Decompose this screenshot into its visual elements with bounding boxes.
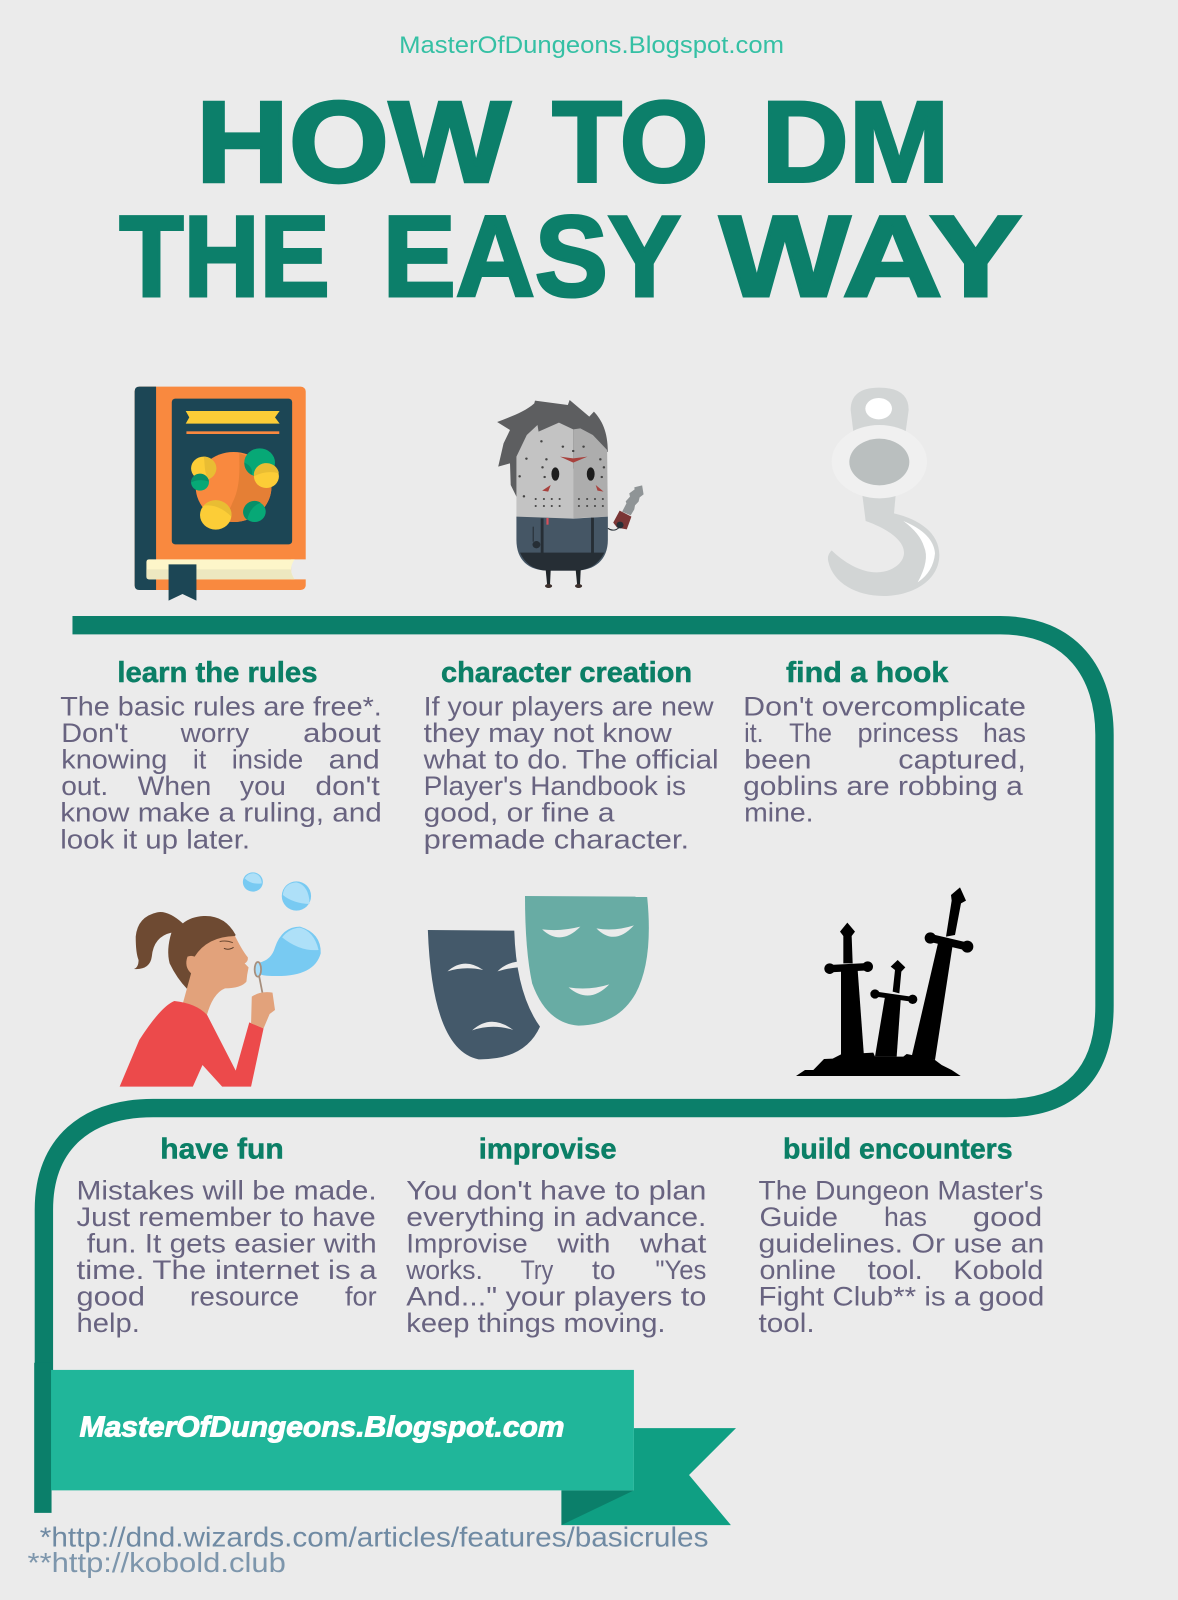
footnote links: **http://kobold.club	[28, 1547, 286, 1578]
icon: crane hook	[828, 388, 939, 596]
text: build encounters: The Dungeon Master's	[758, 1175, 1043, 1205]
footnote links	[28, 1522, 708, 1578]
text: find a hook: princess	[857, 718, 959, 748]
title: EASY	[383, 193, 681, 321]
text: learn the rules: you	[240, 771, 286, 801]
text: learn the rules	[60, 692, 382, 854]
title: TO	[552, 79, 708, 207]
text: learn the rules: about	[303, 718, 381, 748]
text: have fun	[77, 1175, 377, 1338]
icon: swords in the ground	[796, 887, 973, 1076]
text: improvise: with	[556, 1229, 610, 1259]
text: build encounters: tool.	[758, 1308, 815, 1338]
heading: improvise: improvise	[479, 1134, 617, 1166]
text: improvise: everything in advance.	[406, 1202, 706, 1232]
text: build encounters	[758, 1175, 1044, 1338]
icon: rule book	[135, 387, 307, 601]
text: have fun: time. The internet is a	[77, 1255, 377, 1285]
text: learn the rules: worry	[180, 718, 250, 748]
text: improvise: Improvise	[406, 1229, 528, 1259]
text: character creation: If your players are new	[424, 692, 714, 722]
text: build encounters: guidelines. Or use an	[758, 1229, 1044, 1259]
footnote links: *http://dnd.wizards.com/articles/features/basicrules	[40, 1522, 708, 1553]
title: WAY	[720, 193, 1022, 321]
text: build encounters: good	[973, 1202, 1042, 1232]
site url header: MasterOfDungeons.Blogspot.com	[399, 32, 784, 59]
heading: build encounters: build encounters	[783, 1134, 1013, 1166]
text: build encounters: online	[759, 1255, 836, 1285]
text: find a hook: has	[983, 718, 1026, 748]
banner text: MasterOfDungeons.Blogspot.com	[80, 1411, 565, 1443]
heading: learn the rules: learn the rules	[117, 657, 317, 689]
text: learn the rules: knowing	[61, 745, 167, 775]
text: learn the rules: it	[193, 745, 207, 775]
banner ribbon	[51, 1370, 736, 1525]
title: DM	[762, 79, 949, 207]
heading: character creation: character creation	[441, 657, 692, 689]
text: find a hook: Don't overcomplicate	[743, 692, 1026, 722]
text: improvise: And..." your players to	[406, 1282, 706, 1312]
text: find a hook	[743, 692, 1026, 828]
text: improvise: "Yes	[655, 1255, 706, 1285]
text: have fun: resource	[190, 1282, 299, 1312]
text: find a hook: The	[789, 718, 832, 748]
text: have fun: for	[345, 1282, 377, 1312]
text: learn the rules: Don't	[61, 718, 128, 748]
text: character creation: what to do. The official	[423, 745, 719, 775]
winding path line	[43, 625, 1105, 1513]
text: find a hook: captured,	[898, 745, 1026, 775]
icon: hockey mask character	[497, 400, 644, 588]
text: learn the rules: When	[138, 771, 211, 801]
text: improvise: You don't have to plan	[406, 1175, 706, 1205]
text: build encounters: tool.	[868, 1255, 923, 1285]
icon: girl blowing bubbles	[120, 872, 321, 1087]
text: learn the rules: and	[329, 745, 380, 775]
text: have fun: Just remember to have	[77, 1202, 376, 1232]
heading: find a hook: find a hook	[786, 657, 948, 689]
text: find a hook: goblins are robbing a	[743, 771, 1023, 801]
text: have fun: fun. It gets easier with	[87, 1229, 377, 1259]
text: build encounters: has	[884, 1202, 927, 1232]
text: improvise: what	[639, 1229, 707, 1259]
text: character creation: premade character.	[424, 824, 689, 854]
text: character creation: they may not know	[424, 718, 673, 748]
text: learn the rules: The basic rules are free*.	[60, 692, 382, 722]
text: build encounters: Kobold	[953, 1255, 1043, 1285]
text: improvise: to	[592, 1255, 616, 1285]
text: learn the rules: don't	[315, 771, 380, 801]
text: build encounters: Fight Club** is a good	[758, 1282, 1044, 1312]
text: improvise	[405, 1175, 707, 1338]
text: character creation: good, or fine a	[424, 798, 615, 828]
title: HOW	[196, 79, 511, 207]
text: find a hook: mine.	[744, 798, 814, 828]
text: have fun: help.	[77, 1308, 140, 1338]
text: have fun: good	[77, 1282, 145, 1312]
icon: comedy and tragedy masks	[428, 896, 649, 1059]
text: find a hook: been	[744, 745, 812, 775]
text: learn the rules: out.	[61, 771, 108, 801]
text: character creation: Player's Handbook is	[424, 771, 686, 801]
text: build encounters: Guide	[759, 1202, 838, 1232]
heading: have fun: have fun	[160, 1134, 284, 1166]
text: character creation	[423, 692, 719, 854]
text: improvise: Try	[521, 1255, 554, 1285]
text: improvise: works.	[405, 1255, 483, 1285]
title: THE	[119, 193, 330, 321]
title	[119, 79, 1022, 321]
text: have fun: Mistakes will be made.	[77, 1175, 377, 1205]
text: learn the rules: inside	[232, 745, 303, 775]
text: learn the rules: know make a ruling, and	[60, 798, 382, 828]
text: learn the rules: look it up later.	[60, 824, 250, 854]
text: improvise: keep things moving.	[406, 1308, 666, 1338]
text: find a hook: it.	[744, 718, 764, 748]
